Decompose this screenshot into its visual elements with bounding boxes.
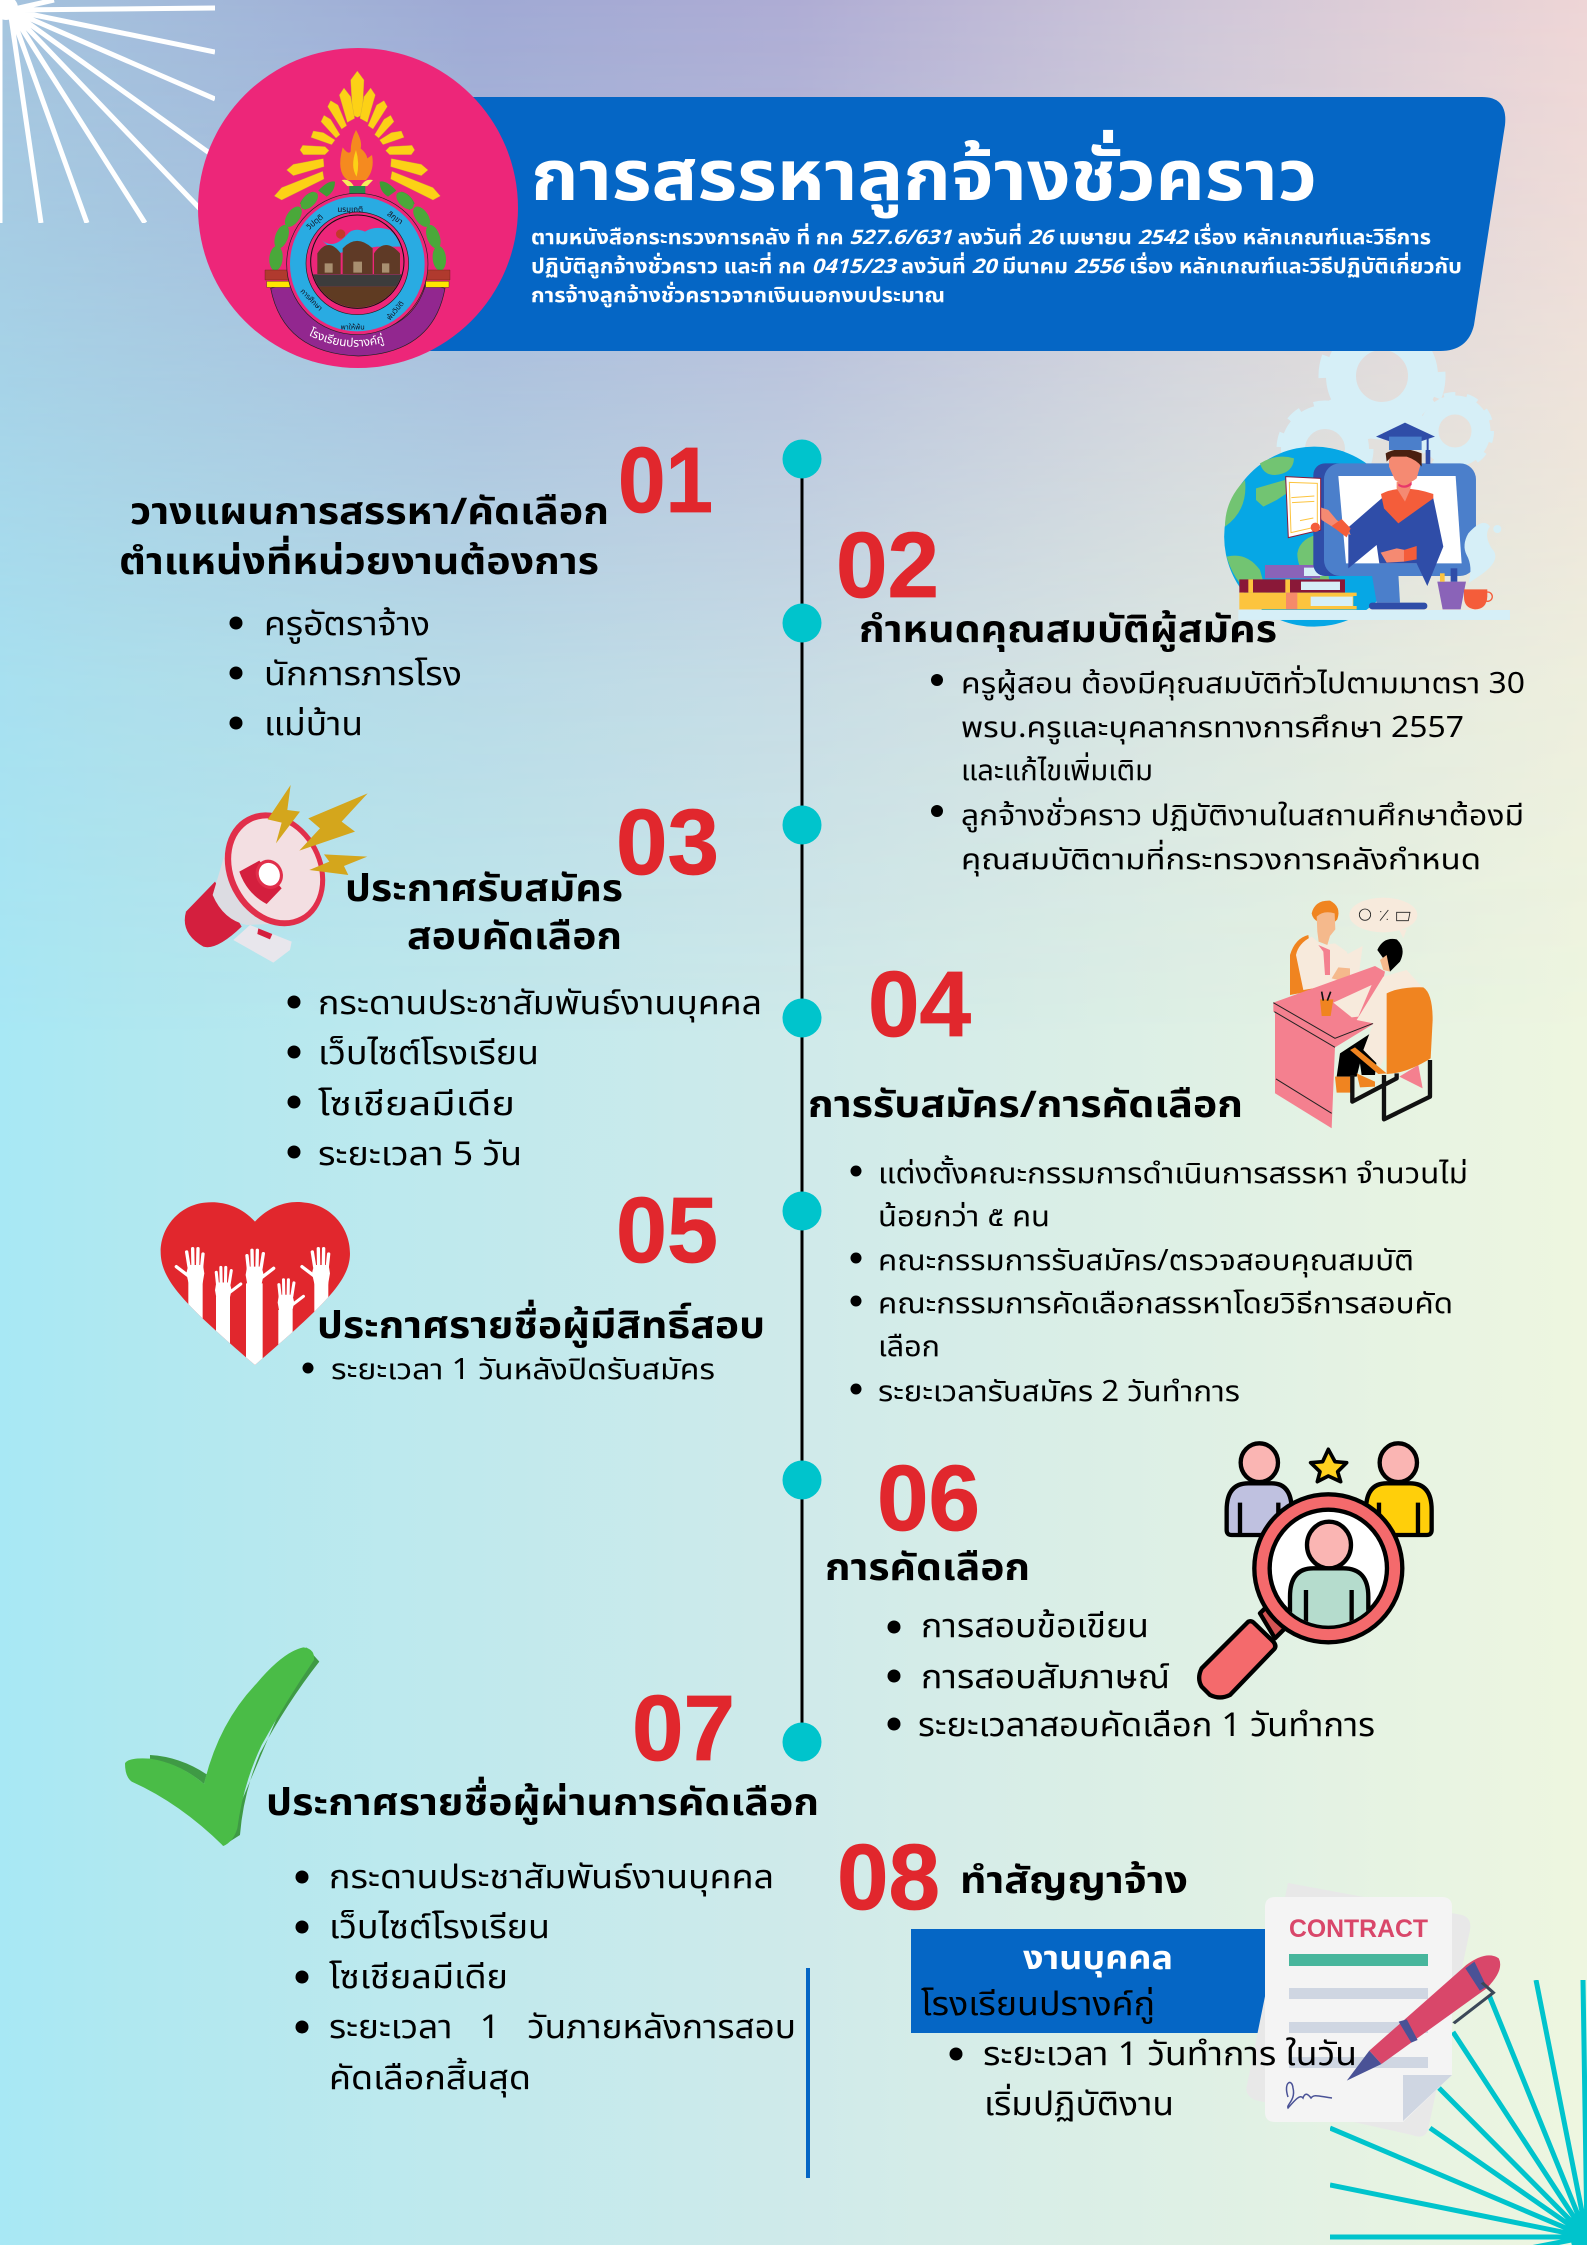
list 01: ครูอัตราจ้าง (264, 600, 430, 650)
list 02: พรบ.ครูและบุคลากรทางการศึกษา 2557 (961, 707, 1464, 751)
step 05 (302, 1178, 765, 1393)
timeline line (800, 459, 804, 1742)
school logo circle: พาให้พ้น (341, 322, 365, 333)
list 06: ระยะเวลาสอบคัดเลือก 1 วันทำการ (918, 1701, 1375, 1751)
school logo circle: โรงเรียนปรางค์กู่ (310, 326, 384, 347)
number 02: 02 (836, 513, 939, 617)
list 03: โซเชียลมีเดีย (318, 1080, 515, 1130)
school logo circle: พ้นวิบัติ (385, 299, 408, 323)
timeline dots (782, 440, 822, 1762)
list 03 (288, 979, 762, 1180)
school logo circle: การศึกษา (297, 287, 324, 314)
heading 03: ประกาศรับสมัคร (345, 862, 623, 918)
step 04 (808, 952, 1468, 1415)
subtitle text: การจ้างลูกจ้างชั่วคราวจากเงินนอกงบประมาณ (531, 281, 945, 311)
list 06 (888, 1602, 1375, 1751)
number 03: 03 (616, 790, 719, 894)
icon: graduate online (1224, 423, 1510, 627)
subtitle text (531, 223, 1462, 311)
heading 08: ทำสัญญาจ้าง (960, 1854, 1188, 1910)
list 02: ลูกจ้างชั่วคราว ปฏิบัติงานในสถานศึกษาต้องมี (961, 795, 1524, 839)
icon: magnifier candidates (1199, 1443, 1432, 1697)
diploma (1286, 477, 1321, 538)
subtitle text: ปฏิบัติลูกจ้างชั่วคราว และที่ กค 0415/23 ลงวันที่ 20 มีนาคม 2556 เรื่อง หลักเกณฑ์และวิธีปฏิบัติเกี่ยวกับ (531, 252, 1462, 282)
list 08: เริ่มปฏิบัติงาน (984, 2080, 1174, 2130)
list 04: คณะกรรมการรับสมัคร/ตรวจสอบคุณสมบัติ (878, 1240, 1414, 1284)
list 02: ครูผู้สอน ต้องมีคุณสมบัติทั่วไปตามมาตรา 30 (961, 663, 1525, 707)
icon: heart with raised hands (161, 1202, 350, 1367)
step 08 (837, 1825, 1271, 2033)
emblem ring text: วิปตฺติ (303, 212, 326, 234)
list 04: เลือก (878, 1326, 940, 1370)
list 07: เว็บไซต์โรงเรียน (329, 1903, 550, 1953)
step 03 (288, 790, 762, 1180)
heading 02: กำหนดคุณสมบัติผู้สมัคร (859, 603, 1277, 659)
list 07 (296, 1853, 796, 2104)
heading 04: การรับสมัคร/การคัดเลือก (808, 1078, 1243, 1134)
department box (911, 1929, 1271, 2033)
list 04: แต่งตั้งคณะกรรมการดำเนินการสรรหา จำนวนไม่ (878, 1153, 1468, 1197)
blue vertical rule (806, 1968, 810, 2178)
school logo circle (198, 48, 518, 368)
icon: pen (1347, 1955, 1500, 2081)
list 01 (230, 600, 462, 750)
heading 07: ประกาศรายชื่อผู้ผ่านการคัดเลือก (266, 1776, 819, 1832)
step 02 (836, 513, 1525, 883)
list 04: ระยะเวลารับสมัคร 2 วันทำการ (878, 1371, 1240, 1415)
list 01: นักการภารโรง (264, 650, 462, 700)
list 02: และแก้ไขเพิ่มเติม (961, 750, 1153, 794)
header banner (420, 97, 1505, 351)
list 08: ระยะเวลา 1 วันทำการ ในวัน (983, 2030, 1357, 2080)
list 02: คุณสมบัติตามที่กระทรวงการคลังกำหนด (961, 839, 1481, 883)
number 01: 01 (618, 428, 713, 532)
icon: megaphone (185, 785, 368, 963)
list 06: การสอบข้อเขียน (921, 1602, 1149, 1652)
department box: โรงเรียนปรางค์กู่ (921, 1980, 1155, 2030)
school logo circle: นรมุเถติ (337, 204, 363, 216)
heading 05: ประกาศรายชื่อผู้มีสิทธิ์สอบ (317, 1299, 765, 1355)
title: การสรรหาลูกจ้างชั่วคราว (531, 126, 1317, 232)
graduate person (1317, 423, 1443, 586)
list 07: ระยะเวลา 1 วันภายหลังการสอบ (329, 2003, 796, 2053)
contract label: CONTRACT (1289, 1915, 1428, 1943)
icon: green check mark (125, 1647, 319, 1846)
step 01 (119, 428, 713, 750)
step 01: ตำแหน่งที่หน่วยงานต้องการ (119, 535, 599, 591)
list 07: คัดเลือกสิ้นสุด (329, 2054, 531, 2104)
subtitle text: ตามหนังสือกระทรวงการคลัง ที่ กค 527.6/631 ลงวันที่ 26 เมษายน 2542 เรื่อง หลักเกณฑ์และวิธีการ (531, 223, 1431, 253)
white sunburst top left (0, 0, 215, 223)
list 02 (931, 663, 1525, 883)
number 07: 07 (632, 1676, 735, 1780)
step 06 (825, 1446, 1375, 1751)
list 04 (850, 1153, 1468, 1415)
icon: contract document (1246, 1883, 1470, 2137)
list 04: น้อยกว่า ๕ คน (878, 1196, 1050, 1240)
icon: job interview (1273, 898, 1433, 1128)
list 01: แม่บ้าน (264, 700, 363, 750)
heading 01: วางแผนการสรรหา/คัดเลือก (130, 485, 609, 541)
teal sunburst bottom right (1330, 1980, 1587, 2245)
icon: school emblem (274, 71, 440, 210)
school logo circle: สิกฺขา (384, 208, 405, 228)
step 07 (266, 1676, 819, 2104)
list 05: ระยะเวลา 1 วันหลังปิดรับสมัคร (331, 1349, 715, 1393)
number 04: 04 (868, 952, 971, 1056)
list 06: การสอบสัมภาษณ์ (921, 1653, 1170, 1703)
list 07: กระดานประชาสัมพันธ์งานบุคคล (329, 1853, 774, 1903)
list 03: กระดานประชาสัมพันธ์งานบุคคล (318, 979, 762, 1029)
list 03: ระยะเวลา 5 วัน (318, 1130, 522, 1180)
list 04: คณะกรรมการคัดเลือกสรรหาโดยวิธีการสอบคัด (878, 1283, 1453, 1327)
list 07: โซเชียลมีเดีย (329, 1953, 508, 2003)
number 06: 06 (877, 1446, 980, 1550)
icon: gears behind graduate (1281, 318, 1490, 493)
department box: งานบุคคล (1023, 1934, 1173, 1984)
pen holder and cup (1437, 568, 1492, 609)
monitor (1313, 463, 1476, 609)
number 05: 05 (616, 1178, 718, 1282)
heading 06: การคัดเลือก (825, 1541, 1030, 1597)
list 08 (950, 2030, 1357, 2130)
list 03: เว็บไซต์โรงเรียน (318, 1029, 539, 1079)
number 08: 08 (837, 1825, 940, 1929)
step 03: สอบคัดเลือก (407, 910, 622, 966)
books (1239, 565, 1357, 609)
